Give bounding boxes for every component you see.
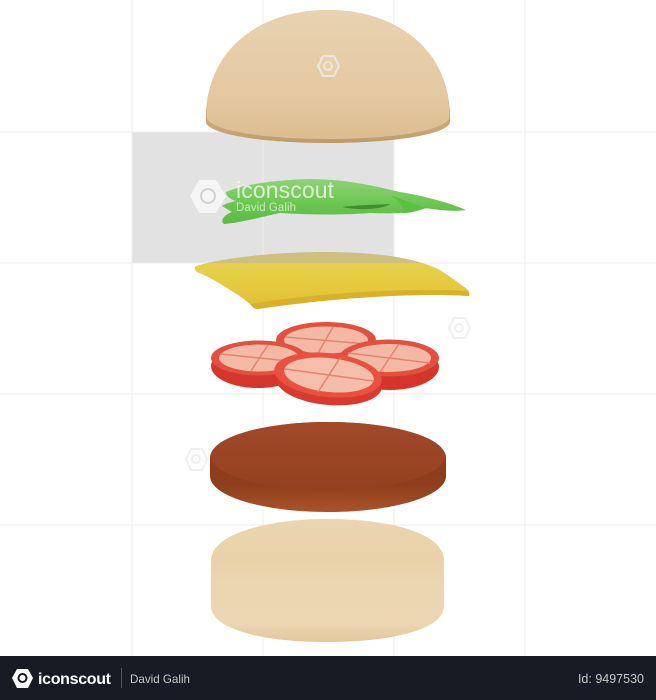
footer brand: iconscout: [38, 671, 112, 688]
bottom bun: [211, 519, 444, 642]
lettuce: [222, 179, 466, 224]
tomato slices: [211, 322, 439, 410]
watermark icons: [186, 56, 470, 470]
watermark: iconscout center: iconscout: [236, 177, 335, 203]
tomato slice: back: [276, 322, 376, 369]
top bun: [206, 10, 450, 143]
watermark: iconscout center: [190, 177, 335, 214]
cheese: [195, 252, 469, 309]
footer author: David Galih: [130, 673, 190, 686]
tomato slice: left: [211, 340, 307, 388]
footer logo: [12, 669, 33, 688]
patty: [210, 422, 446, 512]
tomato slice: front: [272, 347, 384, 410]
watermark: iconscout center: David Galih: [236, 202, 296, 214]
footer bar: [0, 656, 656, 700]
footer id: Id: 9497530: [578, 672, 644, 686]
tomato slice: right: [339, 340, 439, 390]
